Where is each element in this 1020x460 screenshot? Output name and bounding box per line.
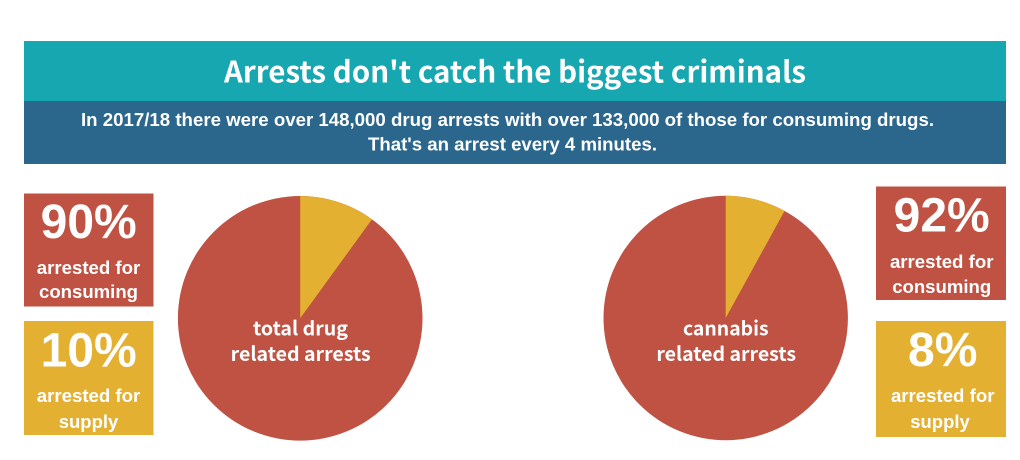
stat box: 90% arrested for consuming: consuming [39, 281, 138, 302]
stat box: 10% arrested for supply [24, 321, 154, 435]
stat box: 10% arrested for supply: supply [59, 411, 119, 432]
stat box: 92% arrested for consuming: arrested for [890, 251, 993, 272]
subtitle text: In 2017/18 there were over 148,000 drug arrests with over 133,000 of those for consuming drugs. [81, 109, 934, 130]
pie label: related arrests [656, 338, 796, 367]
stat box: 92% arrested for consuming [876, 186, 1006, 300]
stat box: 10% arrested for supply: 10% [41, 324, 137, 378]
pie label [656, 312, 796, 367]
stat box: 8% arrested for supply [876, 321, 1006, 437]
subtitle text [81, 109, 934, 154]
pie slice: supply 8% [726, 196, 785, 318]
pie slice: supply 10% [300, 196, 372, 318]
pie label [231, 312, 371, 367]
stat box: 90% arrested for consuming [24, 194, 154, 306]
stat box: 92% arrested for consuming: 92% [894, 190, 990, 242]
stat box: 8% arrested for supply: supply [910, 411, 970, 432]
stat box: 8% arrested for supply: arrested for [891, 385, 994, 406]
title: Arrests don't catch the biggest criminals [223, 50, 806, 92]
title banner [24, 41, 1006, 101]
pie chart: total drug related arrests [178, 196, 422, 441]
stat box: 10% arrested for supply: arrested for [37, 385, 140, 406]
pie label: related arrests [231, 338, 371, 367]
stat box: 90% arrested for consuming: 90% [41, 196, 137, 249]
pie chart: cannabis related arrests [604, 196, 848, 440]
pie label: cannabis [683, 312, 769, 342]
stat box: 90% arrested for consuming: arrested for [37, 257, 140, 278]
subtitle banner [24, 101, 1006, 164]
subtitle text: That's an arrest every 4 minutes. [368, 134, 657, 154]
stat box: 8% arrested for supply: 8% [908, 324, 977, 377]
pie label: total drug [253, 312, 348, 342]
stat box: 92% arrested for consuming: consuming [892, 276, 991, 297]
